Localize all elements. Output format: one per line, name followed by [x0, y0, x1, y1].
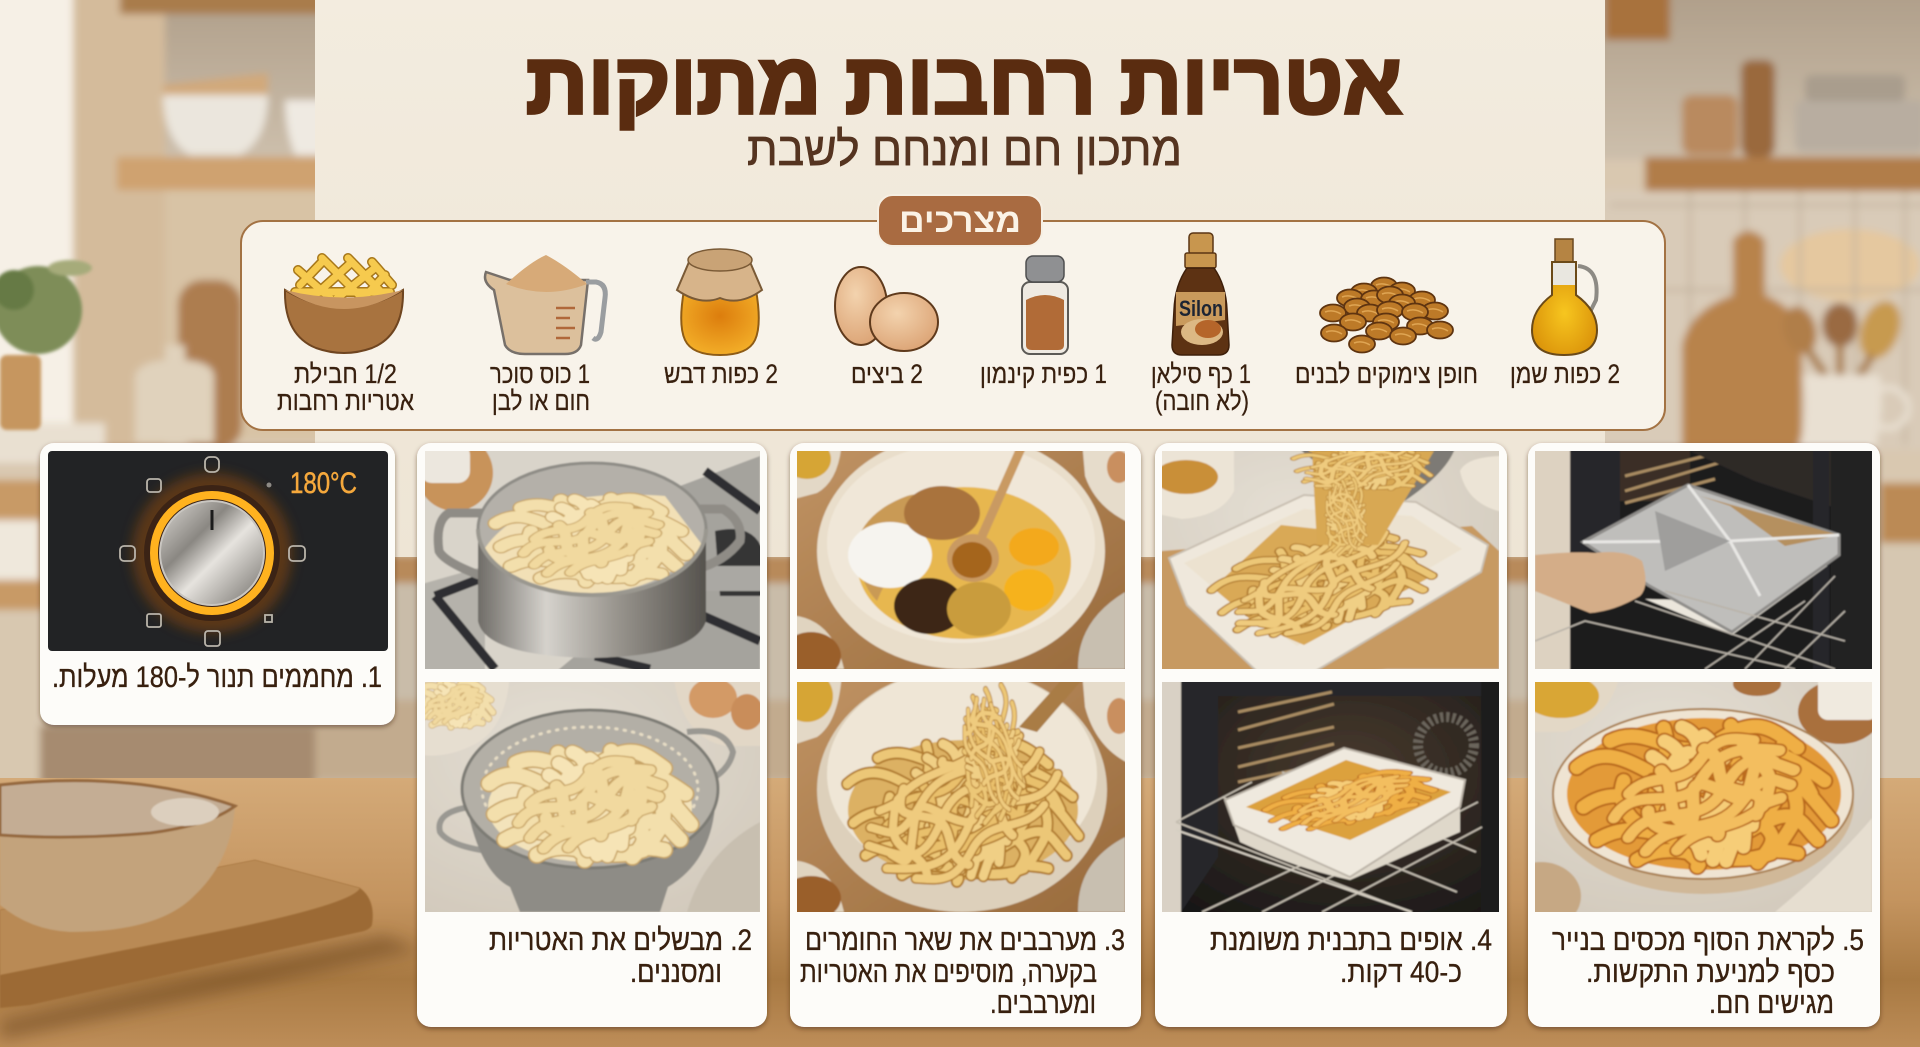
label: silan: [1151, 359, 1251, 416]
subtitle: מתכון חם ומנחם לשבת: [747, 122, 1182, 175]
step 5 text: 5. לקראת הסוף מכסים בנייר: [1552, 924, 1864, 957]
plant on window sill: [0, 260, 92, 430]
label: silan: 1 כף סילאן: [1151, 359, 1251, 389]
temperature readout: 180°C: [290, 467, 357, 500]
step 2 text: ומסננים.: [630, 956, 722, 989]
panel: ingredients: [241, 195, 1665, 430]
label: noodles: 1/2 חבילת: [294, 359, 397, 389]
ceramic bowl on counter: [0, 781, 235, 932]
card: step 5: [1501, 441, 1882, 1027]
step 5 text: [1552, 924, 1864, 1020]
heading pill: ingredients: [878, 195, 1042, 246]
icon: raisins: [1320, 278, 1453, 352]
icon: oil bottle: [1532, 239, 1597, 355]
photo: baking in oven: [1162, 682, 1499, 912]
oven dial image: [48, 451, 388, 651]
photo: finished dish: [1535, 682, 1872, 912]
card: step 1: [40, 443, 395, 725]
photo: mixing ingredients: [797, 451, 1125, 669]
step 2 text: [489, 924, 752, 989]
icon: silan bottle: Silon: [1179, 296, 1223, 321]
label: sugar: [490, 359, 590, 416]
label: cinnamon: 1 כפית קינמון: [980, 359, 1107, 389]
step 4 text: [1210, 924, 1492, 989]
step 5 text: כסף למניעת התקשות.: [1586, 956, 1835, 989]
label: sugar: חום או לבן: [492, 386, 590, 416]
card: step 4: [1152, 435, 1509, 1027]
card: step 3: [781, 433, 1141, 1027]
icon: cinnamon shaker: [1022, 256, 1068, 354]
step 3 text: בקערה, מוסיפים את האטריות: [800, 956, 1097, 989]
label: silan: (לא חובה): [1155, 386, 1249, 416]
step 3 text: ומערבבים.: [990, 987, 1096, 1020]
step 5 text: מגישים חם.: [1709, 987, 1834, 1020]
photo: adding noodles: [797, 682, 1125, 912]
photo: noodles into pan: [1162, 451, 1499, 669]
step 2 text: 2. מבשלים את האטריות: [489, 924, 752, 957]
photo: pot on stove: [425, 451, 760, 669]
label: raisins: חופן צימוקים לבנים: [1295, 359, 1478, 389]
label: noodles: אטריות רחבות: [277, 386, 414, 416]
heading pill: ingredients: מצרכים: [899, 202, 1021, 240]
icon: sugar measuring cup: [485, 255, 605, 354]
label: noodles: [277, 359, 414, 416]
wooden counter: [0, 778, 1920, 1047]
step 4 text: 4. אופים בתבנית משומנת: [1210, 924, 1492, 957]
label: sugar: 1 כוס סוכר: [490, 359, 590, 389]
title panel: [315, 0, 1605, 557]
step 4 text: כ-40 דקות.: [1340, 956, 1462, 989]
icon: eggs: [835, 267, 938, 351]
cutting board: [0, 860, 420, 1040]
label: oil: 2 כפות שמן: [1510, 359, 1620, 389]
card: step 1: 1. מחממים תנור ל-180 מעלות.: [52, 661, 382, 694]
step 3 text: 3. מערבבים את שאר החומרים: [805, 924, 1125, 957]
photo: foil cover: [1535, 451, 1872, 669]
photo: colander: [425, 682, 760, 912]
label: honey: 2 כפות דבש: [664, 359, 778, 389]
card: step 2: [413, 435, 770, 1027]
icon: noodle bowl: [285, 258, 403, 353]
step 3 text: [800, 924, 1125, 1020]
label: eggs: 2 ביצים: [851, 359, 923, 389]
icon: silan bottle: [1172, 233, 1229, 355]
icon: honey jar: [677, 249, 762, 355]
title: אטריות רחבות מתוקות: [526, 36, 1402, 132]
